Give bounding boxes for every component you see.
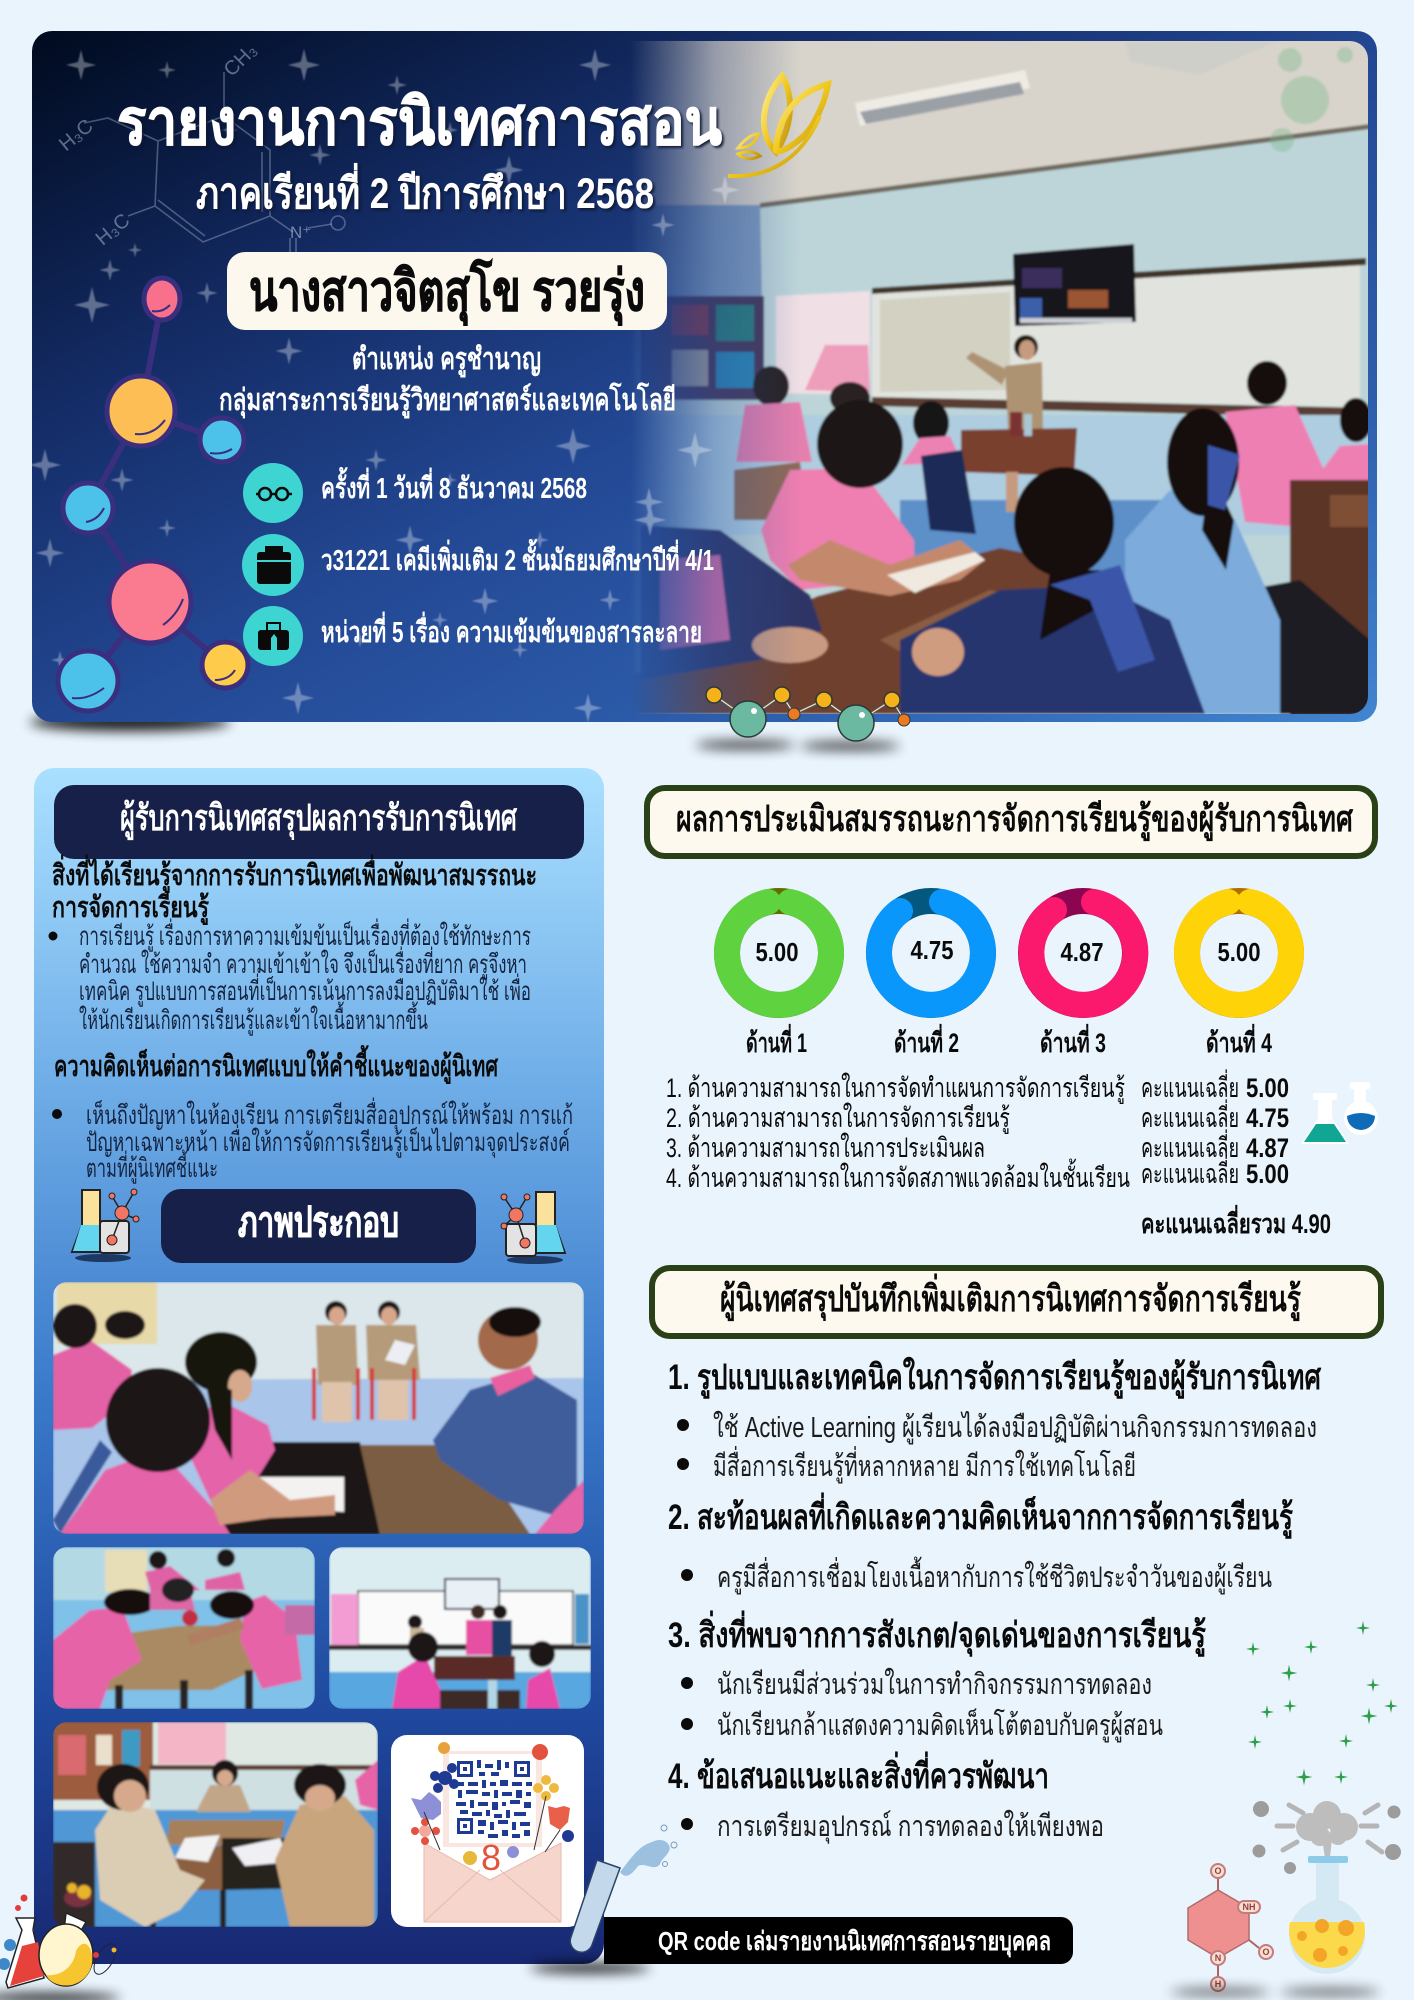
assessment list: 2. ด้านความสามารถในการจัดการเรียนรู้ (666, 1102, 1010, 1134)
notes section 3: นักเรียนมีส่วนร่วมในการทำกิจกรรมการทดลอง (717, 1667, 1152, 1701)
notes section 4 (668, 1751, 1104, 1844)
envelope (424, 1843, 561, 1922)
molecule illustration (58, 278, 248, 711)
info row: date: ครั้งที่ 1 วันที่ 8 ธันวาคม 2568 (321, 466, 587, 505)
shadows under header (30, 713, 230, 731)
icon: briefcase (258, 623, 289, 650)
donut chart: aspect 3: 4.87 (1060, 937, 1104, 967)
notes section 1: มีสื่อการเรียนรู้ที่หลากหลาย มีการใช้เทคโนโลยี (713, 1446, 1136, 1484)
donut chart: aspect 1: ด้านที่ 1 (746, 1023, 807, 1058)
icon: teal and blue flasks (1301, 1082, 1378, 1144)
score list: 4.75 (1246, 1103, 1289, 1133)
title: รายงานการนิเทศการสอน (117, 86, 722, 158)
decoration: starfield (29, 49, 739, 722)
QR code card: 8 (481, 1837, 501, 1878)
text block: opinion on coaching (52, 1044, 573, 1184)
notes section 3 (668, 1610, 1206, 1743)
photo: students presenting at the board (329, 1547, 591, 1709)
icon: hexagon molecule: H (1215, 1979, 1221, 1989)
score list: 5.00 (1246, 1159, 1289, 1189)
icon: red and yellow lab flasks (0, 1894, 120, 1988)
text block: opinion on coaching: เห็นถึงปัญหาในห้องเรียน การเตรียมสื่ออุปกรณ์ให้พร้อม การแก้ (86, 1097, 573, 1131)
info row: unit: หน่วยที่ 5 เรื่อง ความเข้มข้นของสารละลาย (321, 611, 702, 649)
subtitle: ภาคเรียนที่ 2 ปีการศึกษา 2568 (196, 163, 654, 218)
icon: glasses (256, 488, 292, 500)
icon: hexagon molecule: O (1214, 1866, 1222, 1876)
decoration: chemical formula watermark: H₃C (92, 209, 134, 250)
icon: erupting flask (1252, 1801, 1401, 1974)
info row: date (243, 463, 587, 523)
notes section 4: การเตรียมอุปกรณ์ การทดลองให้เพียงพอ (717, 1809, 1104, 1844)
photo: teachers planning at table (53, 1722, 378, 1927)
info row: subject (242, 534, 714, 596)
decoration: chemical formula watermark (55, 39, 345, 279)
score list: คะแนนเฉลี่ย (1141, 1155, 1239, 1189)
icon: small molecule on banner edge (706, 687, 910, 741)
heading: supervisee summary: ผู้รับการนิเทศสรุปผลการรับการนิเทศ (120, 797, 518, 841)
score list: คะแนนเฉลี่ย (1141, 1069, 1239, 1103)
QR pattern (456, 1760, 532, 1838)
position: ตำแหน่ง ครูชำนาญ (352, 343, 541, 378)
icon: toolbox (257, 546, 291, 584)
QR code card (391, 1735, 584, 1927)
icon: gold leaf logo (728, 76, 828, 176)
text block: what was learned: ให้นักเรียนเกิดการเรียนรู้และเข้าใจเนื้อหามากขึ้น (79, 1001, 428, 1036)
heading box: competency assessment (647, 788, 1375, 856)
bottom right shadow (1170, 1988, 1380, 1996)
donut chart: aspect 4: ด้านที่ 4 (1206, 1023, 1272, 1058)
heading: supervisee summary (54, 785, 584, 859)
heading: illustrations: ภาพประกอบ (238, 1199, 399, 1245)
flowers (411, 1742, 574, 1865)
notes section 3: นักเรียนกล้าแสดงความคิดเห็นโต้ตอบกับครูผู้สอน (717, 1707, 1163, 1743)
icon: test tube with splash (570, 1825, 677, 1952)
info row: subject: ว31221 เคมีเพิ่มเติม 2 ชั้นมัธยมศึกษาปีที่ 4/1 (321, 538, 714, 577)
donut chart: aspect 4: 5.00 (1218, 937, 1260, 967)
heading: illustrations (161, 1189, 476, 1263)
decoration: chemical formula watermark: CH₃ (220, 39, 261, 81)
assessment list: 3. ด้านความสามารถในการประเมินผล (666, 1132, 985, 1163)
donut chart: aspect 2: 4.75 (910, 935, 954, 965)
notes section 1 (668, 1356, 1322, 1484)
department: กลุ่มสาระการเรียนรู้วิทยาศาสตร์และเทคโนโลยี (219, 381, 676, 419)
text block: what was learned: การเรียนรู้ เรื่องการหาความเข้มข้นเป็นเรื่องที่ต้องใช้ทักษะการ (79, 918, 531, 952)
score list: 4.87 (1246, 1133, 1289, 1163)
panel: supervisee summary (34, 768, 604, 1964)
score list: คะแนนเฉลี่ย (1141, 1129, 1239, 1163)
text block: opinion on coaching: ปัญหาเฉพาะหน้า เพื่อให้การจัดการเรียนรู้เป็นไปตามจุดประสงค์ (86, 1124, 570, 1158)
icon: hexagon molecule (1188, 1864, 1273, 1991)
decoration: green sparkles (1246, 1621, 1398, 1785)
donut chart: aspect 2 (879, 901, 983, 1058)
text block: what was learned: คำนวณ ใช้ความจำ ความเข้าเข้าใจ จึงเป็นเรื่องที่ยาก ครูจึงหา (79, 946, 527, 980)
decoration: chemical formula watermark: N⁺ (290, 223, 311, 242)
photo: teacher and students in classroom (620, 31, 1372, 721)
icon: hexagon molecule: NH (1242, 1902, 1256, 1912)
icon: hexagon molecule: O (1262, 1947, 1270, 1957)
text block: what was learned (48, 854, 537, 1036)
text block: opinion on coaching: ตามที่ผู้นิเทศชี้แนะ (86, 1149, 218, 1184)
notes section 3: 3. สิ่งที่พบจากการสังเกต/จุดเด่นของการเรียนรู้ (668, 1610, 1206, 1657)
text block: opinion on coaching: ความคิดเห็นต่อการนิเทศแบบให้คำชี้แนะของผู้นิเทศ (54, 1044, 498, 1084)
assessment list: 4. ด้านความสามารถในการจัดสภาพแวดล้อมในชั้นเรียน (666, 1158, 1130, 1193)
QR caption bar: QR code เล่มรายงานนิเทศการสอนรายบุคคล (658, 1926, 1051, 1958)
photo: students discussing with observers (53, 1282, 584, 1534)
score list: คะแนนเฉลี่ย (1141, 1099, 1239, 1133)
donut chart: aspect 1 (727, 901, 831, 1058)
name badge: นางสาวจิตสุโข รวยรุ่ง (249, 258, 645, 326)
score list (1141, 1069, 1289, 1189)
info row: unit (243, 606, 702, 666)
molecule ground shadow (695, 741, 900, 750)
panel label shadow (0, 1963, 650, 2000)
donut chart: aspect 1: 5.00 (756, 937, 798, 967)
photo: students doing experiment (53, 1547, 315, 1709)
assessment list: 1. ด้านความสามารถในการจัดทำแผนการจัดการเรียนรู้ (666, 1072, 1125, 1104)
text block: what was learned: สิ่งที่ได้เรียนรู้จากการรับการนิเทศเพื่อพัฒนาสมรรถนะ (52, 854, 537, 893)
decoration: chemical formula watermark: H₃C (55, 115, 98, 156)
icon: right flask and beaker (501, 1192, 565, 1264)
assessment list (666, 1072, 1130, 1193)
donut chart: aspect 4 (1187, 901, 1291, 1058)
text block: what was learned: การจัดการเรียนรู้ (52, 892, 209, 925)
donut chart: aspect 3: ด้านที่ 3 (1040, 1023, 1106, 1058)
score list: 5.00 (1246, 1073, 1289, 1103)
icon: hexagon molecule: N (1215, 1953, 1221, 1963)
donut chart: aspect 3 (1031, 901, 1135, 1058)
panel: hero banner (29, 31, 1377, 722)
text block: what was learned: เทคนิค รูปแบบการสอนที่เป็นการเน้นการลงมือปฏิบัติมาใช้ เพื่อ (79, 973, 531, 1007)
total score: คะแนนเฉลี่ยรวม 4.90 (1141, 1204, 1331, 1239)
icon: left flask and beaker (72, 1189, 139, 1262)
name badge (227, 252, 667, 330)
notes section 4: 4. ข้อเสนอแนะและสิ่งที่ควรพัฒนา (668, 1751, 1049, 1796)
QR caption bar (604, 1917, 1073, 1964)
heading box: additional notes (652, 1268, 1381, 1336)
donut chart: aspect 2: ด้านที่ 2 (894, 1023, 959, 1058)
notes section 2 (668, 1492, 1293, 1595)
